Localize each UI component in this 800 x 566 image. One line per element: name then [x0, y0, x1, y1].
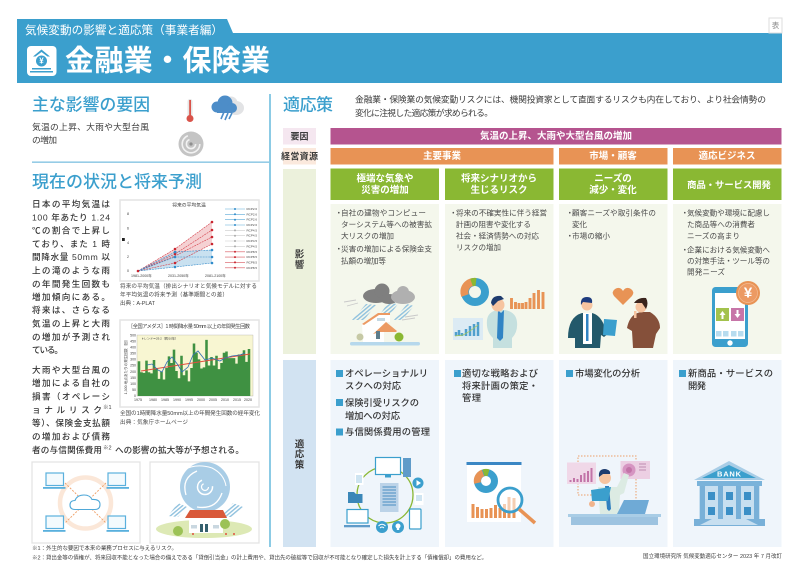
text: impact 4: た商品等への消費者 — [687, 219, 755, 229]
text: current state body: 100 年あたり 1.24 — [32, 211, 110, 222]
divider — [32, 162, 269, 163]
panel: adaptation 4 — [673, 360, 782, 547]
text: impact 1: ・ — [335, 208, 343, 218]
text: impact 2: 社会・経済情勢への対応 — [456, 230, 539, 240]
banner: climate factors — [330, 128, 782, 144]
illustration: customer thinking — [627, 298, 660, 348]
text: current state body: 将来は、さらなる — [32, 304, 110, 315]
card: needs change: 減少・変化 — [589, 184, 637, 196]
chart: donut — [464, 282, 485, 302]
row label: impact: 響 — [295, 259, 305, 271]
text: impact 3: ・ — [566, 232, 574, 240]
text: current state body: 間降水量 50mm 以 — [32, 251, 110, 262]
list: adaptation 3: 市場変化の分析 — [575, 368, 640, 378]
card: needs change: ニーズの — [594, 172, 632, 184]
bar chart: heavy rainfall frequency: 2000 — [197, 398, 205, 402]
line chart: future temperature: 2 — [127, 255, 129, 259]
text: current state body: 日本の平均気温は — [32, 198, 110, 209]
text: adaptation intro — [355, 94, 766, 118]
text: current state body: 等）、保険金支払額 — [32, 417, 110, 428]
list: adaptation 1: スクへの対応 — [345, 380, 402, 391]
line chart: future temperature: 2031-2050年 — [168, 273, 189, 278]
icon: typhoon — [178, 132, 204, 156]
caption: rainfall chart — [120, 409, 260, 426]
header: core business: 主要事業 — [423, 150, 461, 162]
card: extreme weather: 極端な気象や — [356, 172, 414, 184]
bar chart: heavy rainfall frequency — [120, 320, 259, 407]
text: factors: の増加 — [32, 134, 57, 145]
text: current state body: ※2 — [103, 444, 112, 452]
bar chart: heavy rainfall frequency: 450 — [130, 340, 136, 344]
illustration: cloud network — [32, 462, 140, 543]
bar chart: heavy rainfall frequency: ［全国アメダス］1 時間降水量 50mm 以上の年間発生回数 — [128, 322, 251, 330]
row label: management resources — [281, 148, 318, 164]
text: current state body: 増加傾向にある。 — [32, 291, 110, 302]
text: impact 4: 企業における気候変動へ — [687, 244, 770, 254]
panel divider vertical — [269, 94, 271, 547]
icon: heart — [613, 288, 633, 305]
line chart: future temperature — [120, 200, 259, 281]
chart: orange bars — [512, 290, 543, 309]
text: impact 3 — [566, 208, 656, 240]
bar chart: heavy rainfall frequency: 1980 — [149, 398, 157, 402]
illustration: analyst at desk — [567, 456, 661, 525]
illustration: house in storm — [344, 284, 420, 346]
bar chart: heavy rainfall frequency: 150 — [130, 376, 136, 380]
panel: impact 1 — [330, 204, 439, 354]
text: current state body — [32, 198, 244, 455]
icon: rain cloud — [212, 96, 244, 120]
header: market and customers: 市場・顧客 — [589, 150, 637, 162]
panel: main factors — [32, 96, 244, 156]
row label: adaptation: 策 — [295, 459, 305, 471]
text: impact 1: 自社の建物やコンピュー — [341, 208, 426, 218]
illustration: bank building — [694, 461, 765, 526]
text: impact 4: ・ — [681, 246, 689, 254]
text: impact 1 — [335, 208, 432, 266]
panel: adaptation 1 — [330, 360, 439, 547]
source credit: 国立環境研究所 気候変動適応センター 2023 年 7 月改訂 — [643, 552, 782, 560]
bar chart: heavy rainfall frequency: 2010 — [221, 398, 229, 402]
panel: impact 3 — [559, 204, 668, 354]
list: adaptation 4: 開発 — [688, 380, 707, 391]
banner: climate factors: 気温の上昇、大雨や大型台風の増加 — [480, 130, 632, 142]
text: current state body: への影響の拡大等が予想される。 — [115, 444, 244, 455]
caption: temperature chart: 将来の平均気温（排出シナリオと気候モデルに対する — [120, 282, 257, 290]
bar chart: heavy rainfall frequency: 2005 — [209, 398, 217, 402]
text: adaptation intro: 金融業・保険業の気候変動リスクには、機関投資家として直面するリスクも内在しており、より社会情勢の — [355, 94, 766, 104]
row label: impact — [283, 169, 316, 354]
text: current state body: 気温の上昇と大雨 — [32, 318, 110, 328]
header banner — [17, 19, 782, 83]
card: extreme weather: 災害の増加 — [361, 184, 409, 196]
text: impact 4: ニーズの高まり — [687, 230, 740, 240]
bar chart: heavy rainfall frequency: 1990 — [173, 398, 181, 402]
line chart: future temperature: RCP2.6 — [246, 207, 257, 211]
text: impact 1: 大リスクの増加 — [341, 230, 394, 240]
heading: adaptation: 適応策 — [283, 96, 333, 114]
line chart: future temperature: RCP8.5 — [246, 260, 257, 264]
line chart: future temperature: 1981-2000年 — [131, 273, 152, 278]
text: impact 4 — [681, 208, 770, 276]
line chart: future temperature: 6 — [127, 226, 129, 230]
illustration: typhoon over house — [150, 462, 259, 543]
text: factors — [32, 121, 149, 145]
list: adaptation 2 — [454, 368, 539, 403]
list: adaptation 4: 新商品・サービスの — [688, 368, 773, 378]
row label: adaptation: 応 — [295, 450, 305, 460]
subtitle: 気候変動の影響と適応策（事業者編） — [25, 23, 223, 37]
bar chart: heavy rainfall frequency: 1,300 地点あたりの発生回数（回） — [123, 338, 128, 394]
line chart: future temperature: RCP2.6 — [246, 212, 257, 216]
text: current state body: ※1 — [103, 404, 112, 411]
text: impact 4: ・ — [681, 208, 689, 218]
footnotes — [32, 544, 487, 562]
illustration: phone with yen: ¥ — [744, 284, 753, 302]
line chart: future temperature: 4 — [127, 241, 129, 245]
panel: impact 4 — [673, 204, 782, 354]
line chart: future temperature: 8 — [127, 212, 129, 216]
bar chart: heavy rainfall frequency: 400 — [130, 346, 136, 350]
text: impact 2: ・ — [450, 208, 457, 218]
bar chart: heavy rainfall frequency: 1985 — [161, 398, 169, 402]
panel: adaptation 3 — [559, 360, 668, 547]
header: adaptation business — [673, 148, 782, 164]
bar chart: heavy rainfall frequency: 350 — [130, 352, 136, 356]
text: impact 2: 将来の不確実性に伴う経営 — [456, 208, 547, 218]
caption: temperature chart: 出典：A-PLAT — [120, 299, 156, 307]
line chart: future temperature: RCP4.5 — [246, 239, 257, 243]
text: current state body: 損害（オペレーシ — [32, 390, 110, 402]
text: impact 4: の対策手法・ツール等の — [687, 256, 770, 266]
list: adaptation 1: 増加への対応 — [345, 410, 401, 421]
text: current state body: の年間発生回数も — [32, 278, 110, 289]
list: adaptation 1: オペレーショナルリ — [345, 368, 428, 378]
line chart: future temperature: RCP4.5 — [246, 244, 257, 248]
illustration: analysis report with magnifier — [466, 462, 535, 523]
text: current state body: 者の与信関係費用 — [32, 444, 102, 455]
icon: thermometer — [186, 99, 194, 122]
text: impact 2: 計画の阻害や変化する — [456, 219, 531, 229]
line chart: future temperature: 将来の平均気温 — [172, 202, 206, 208]
bar chart: heavy rainfall frequency: 200 — [130, 370, 136, 374]
text: impact 4: 気候変動や環境に配慮し — [687, 208, 770, 218]
text: current state body: の増加が予測され — [32, 331, 110, 342]
text: impact 3: 顧客ニーズや取引条件の — [572, 208, 656, 218]
tag: table label — [769, 18, 782, 33]
bar chart: heavy rainfall frequency: 2015 — [233, 398, 241, 402]
line chart: future temperature: RCP2.6 — [246, 223, 257, 227]
caption: temperature chart — [120, 282, 257, 307]
text: impact 1: 払額の増加等 — [341, 256, 386, 266]
bar chart: heavy rainfall frequency: 2020 — [244, 398, 252, 402]
line chart: future temperature: 2081-2100年 — [205, 273, 226, 278]
list: adaptation 2: 管理 — [462, 392, 481, 403]
header: market and customers — [559, 148, 668, 164]
line chart: future temperature: RCP8.5 — [246, 255, 257, 259]
bar chart: heavy rainfall frequency: 50 — [132, 388, 136, 392]
card: needs change — [559, 168, 668, 200]
line chart: future temperature: RCP4.5 — [246, 234, 257, 238]
text: current state body: ており、また 1 時 — [32, 238, 110, 249]
text: current state body: ョナルリスク — [32, 405, 102, 415]
row label: management resources: 経営資源 — [281, 150, 318, 162]
text: impact 4: 開発ニーズ — [687, 266, 725, 276]
text: impact 1: ・ — [335, 244, 343, 254]
line chart: future temperature: RCP8.5 — [246, 266, 257, 270]
illustration: thinking man — [487, 296, 517, 348]
text: current state body: 増加による自社の — [32, 377, 110, 388]
caption: temperature chart: 年平均気温の将来予測（基準期間との差） — [120, 290, 228, 298]
card: product development — [673, 168, 782, 200]
text: current state body: の増加および債務 — [32, 430, 110, 442]
card: scenario risk — [445, 168, 554, 200]
illustration: businessman with document — [568, 297, 617, 348]
text: impact 2: リスクの増加 — [456, 242, 501, 252]
text: impact 1: 災害の増加による保険金支 — [341, 244, 432, 254]
title: 金融業・保険業 — [65, 44, 270, 78]
text: adaptation intro: 変化に注視した適応策が求められる。 — [355, 107, 493, 118]
card: scenario risk: 将来シナリオから — [461, 172, 537, 184]
heading: current state: 現在の状況と将来予測 — [32, 172, 202, 192]
bar chart: heavy rainfall frequency: 300 — [130, 358, 136, 362]
row label: adaptation: 適 — [295, 438, 305, 450]
row label: factor — [283, 128, 316, 144]
text: current state body: ている。 — [32, 345, 63, 355]
bar chart: heavy rainfall frequency: 500 — [130, 334, 136, 338]
icon: bank with yen — [27, 46, 56, 76]
bar chart: heavy rainfall frequency: トレンド＝29.2（回/10年） — [141, 336, 178, 340]
text: factors: 気温の上昇、大雨や大型台風 — [32, 121, 149, 132]
line chart: future temperature: RCP8.5 — [246, 250, 257, 254]
text: impact 3: 変化 — [572, 219, 587, 229]
text: current state body: ℃の割合で上昇し — [32, 225, 110, 236]
header: adaptation business: 適応ビジネス — [698, 150, 756, 162]
line chart: future temperature: RCP4.5 — [246, 228, 257, 232]
caption: rainfall chart: 出典：気象庁ホームページ — [120, 418, 188, 426]
list: adaptation 4 — [679, 368, 773, 391]
bar chart: heavy rainfall frequency: 250 — [130, 364, 136, 368]
text: impact 1: ターシステム等への被害拡 — [341, 219, 432, 229]
chart: blue bars board — [453, 318, 483, 340]
panel: impact 2 — [445, 204, 554, 354]
row label: factor: 要因 — [290, 132, 309, 142]
icon: bank with yen: ¥ — [39, 56, 44, 66]
footnotes: ※2：貸出金等の債権が、将来回収不能となった場合の備えである「貸倒引当金」の計上費用や、貸出先の破綻等で回収が不可能となり確定した損失を計上する「債権償却」の費用など。 — [32, 554, 487, 562]
row label: adaptation — [283, 360, 316, 547]
line chart: future temperature: RCP2.6 — [246, 218, 257, 222]
list: adaptation 1: 与信関係費用の管理 — [345, 426, 430, 437]
header: core business — [330, 148, 554, 164]
bar chart: heavy rainfall frequency: 100 — [130, 382, 136, 386]
card: product development: 商品・サービス開発 — [687, 179, 772, 190]
text: current state body: 上の滝のような雨 — [32, 264, 110, 276]
text: current state body: 大雨や大型台風の — [32, 364, 110, 375]
bar chart: heavy rainfall frequency: 1995 — [185, 398, 193, 402]
line chart: future temperature: 0 — [127, 269, 129, 273]
illustration: devices network — [344, 458, 424, 533]
row label: impact: 影 — [295, 248, 305, 260]
bar chart: heavy rainfall frequency: 1975 — [134, 398, 142, 402]
panel: adaptation 2 — [445, 360, 554, 547]
text: impact 2 — [450, 208, 547, 252]
bar chart: heavy rainfall frequency: 0 — [134, 394, 136, 398]
text: impact 3: 市場の縮小 — [572, 230, 610, 240]
text: impact 3: ・ — [566, 208, 574, 218]
panel: current state and forecast — [32, 172, 260, 543]
caption: rainfall chart: 全国の1時間降水量50mm以上の年間発生回数の経年変化 — [120, 409, 260, 417]
card: scenario risk: 生じるリスク — [470, 184, 528, 196]
list: adaptation 2: 将来計画の策定・ — [462, 380, 538, 391]
illustration: bank building: BANK — [717, 470, 742, 478]
list: adaptation 1 — [336, 368, 430, 437]
tag: table label: 表 — [772, 20, 780, 30]
card: extreme weather — [330, 168, 439, 200]
list: adaptation 2: 適切な戦略および — [462, 368, 539, 378]
heading: main factors: 主な影響の要因 — [32, 96, 150, 114]
list: adaptation 1: 保険引受リスクの — [345, 397, 419, 408]
illustration: phone with yen — [712, 281, 760, 347]
footnotes: ※1：外生的な要因で本来の業務プロセスに与えるリスク。 — [32, 544, 177, 552]
